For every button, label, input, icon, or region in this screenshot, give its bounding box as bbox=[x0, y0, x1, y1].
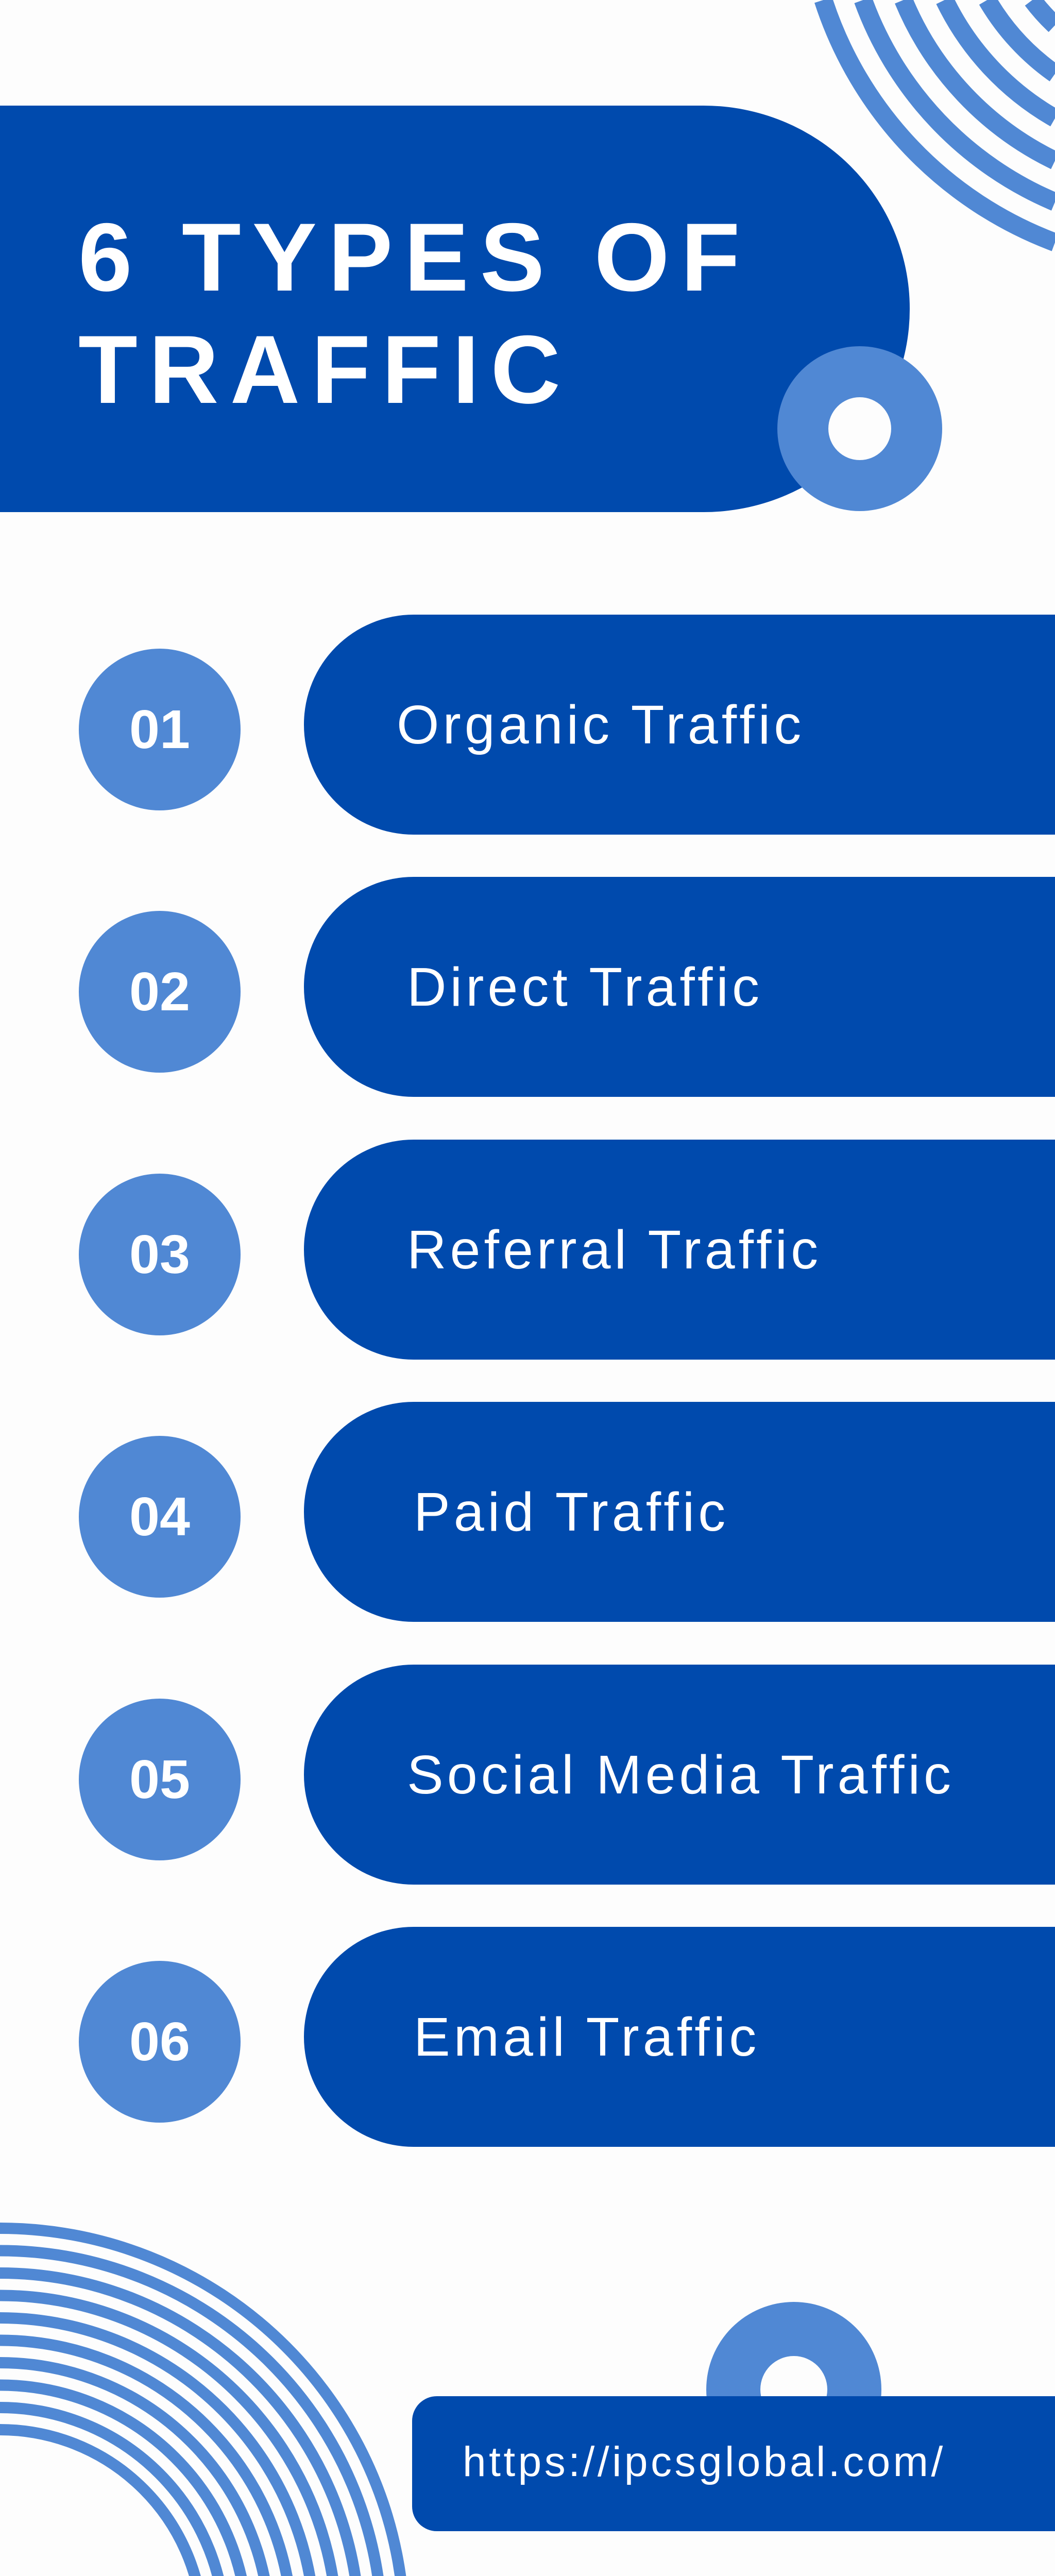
title: TRAFFIC bbox=[78, 315, 572, 423]
row 05 bbox=[79, 1665, 1055, 1885]
title: 6 TYPES OF bbox=[78, 203, 752, 311]
label bbox=[304, 1927, 1055, 2147]
label bbox=[304, 615, 1055, 835]
number 06 bbox=[79, 1961, 241, 2123]
number 02 bbox=[79, 911, 241, 1073]
row 01 bbox=[79, 615, 1055, 835]
row 04 bbox=[79, 1402, 1055, 1622]
icon: ring above url bbox=[706, 2302, 881, 2477]
row 02 bbox=[79, 877, 1055, 1097]
title banner bbox=[0, 106, 910, 512]
icon: ring on banner bbox=[777, 346, 942, 511]
row 06 bbox=[79, 1927, 1055, 2147]
number 03: 03 bbox=[129, 1224, 190, 1285]
label bbox=[304, 1665, 1055, 1885]
label: Referral Traffic bbox=[407, 1219, 822, 1280]
number 05 bbox=[79, 1699, 241, 1860]
number 01 bbox=[79, 649, 241, 810]
label bbox=[304, 1402, 1055, 1622]
number 05: 05 bbox=[129, 1749, 190, 1810]
number 06: 06 bbox=[129, 2011, 190, 2072]
label: Social Media Traffic bbox=[407, 1744, 955, 1805]
number 02: 02 bbox=[129, 961, 190, 1022]
label: Direct Traffic bbox=[407, 957, 763, 1018]
row 03 bbox=[79, 1140, 1055, 1360]
title bbox=[78, 203, 752, 423]
label: Paid Traffic bbox=[414, 1482, 729, 1543]
label: Organic Traffic bbox=[397, 694, 805, 755]
number 01: 01 bbox=[129, 699, 190, 760]
number 03 bbox=[79, 1174, 241, 1335]
label: Email Traffic bbox=[414, 2007, 760, 2067]
number 04: 04 bbox=[129, 1486, 190, 1547]
number 04 bbox=[79, 1436, 241, 1598]
label bbox=[304, 877, 1055, 1097]
url footer bbox=[412, 2396, 1055, 2531]
url text: https://ipcsglobal.com/ bbox=[463, 2438, 946, 2485]
label bbox=[304, 1140, 1055, 1360]
